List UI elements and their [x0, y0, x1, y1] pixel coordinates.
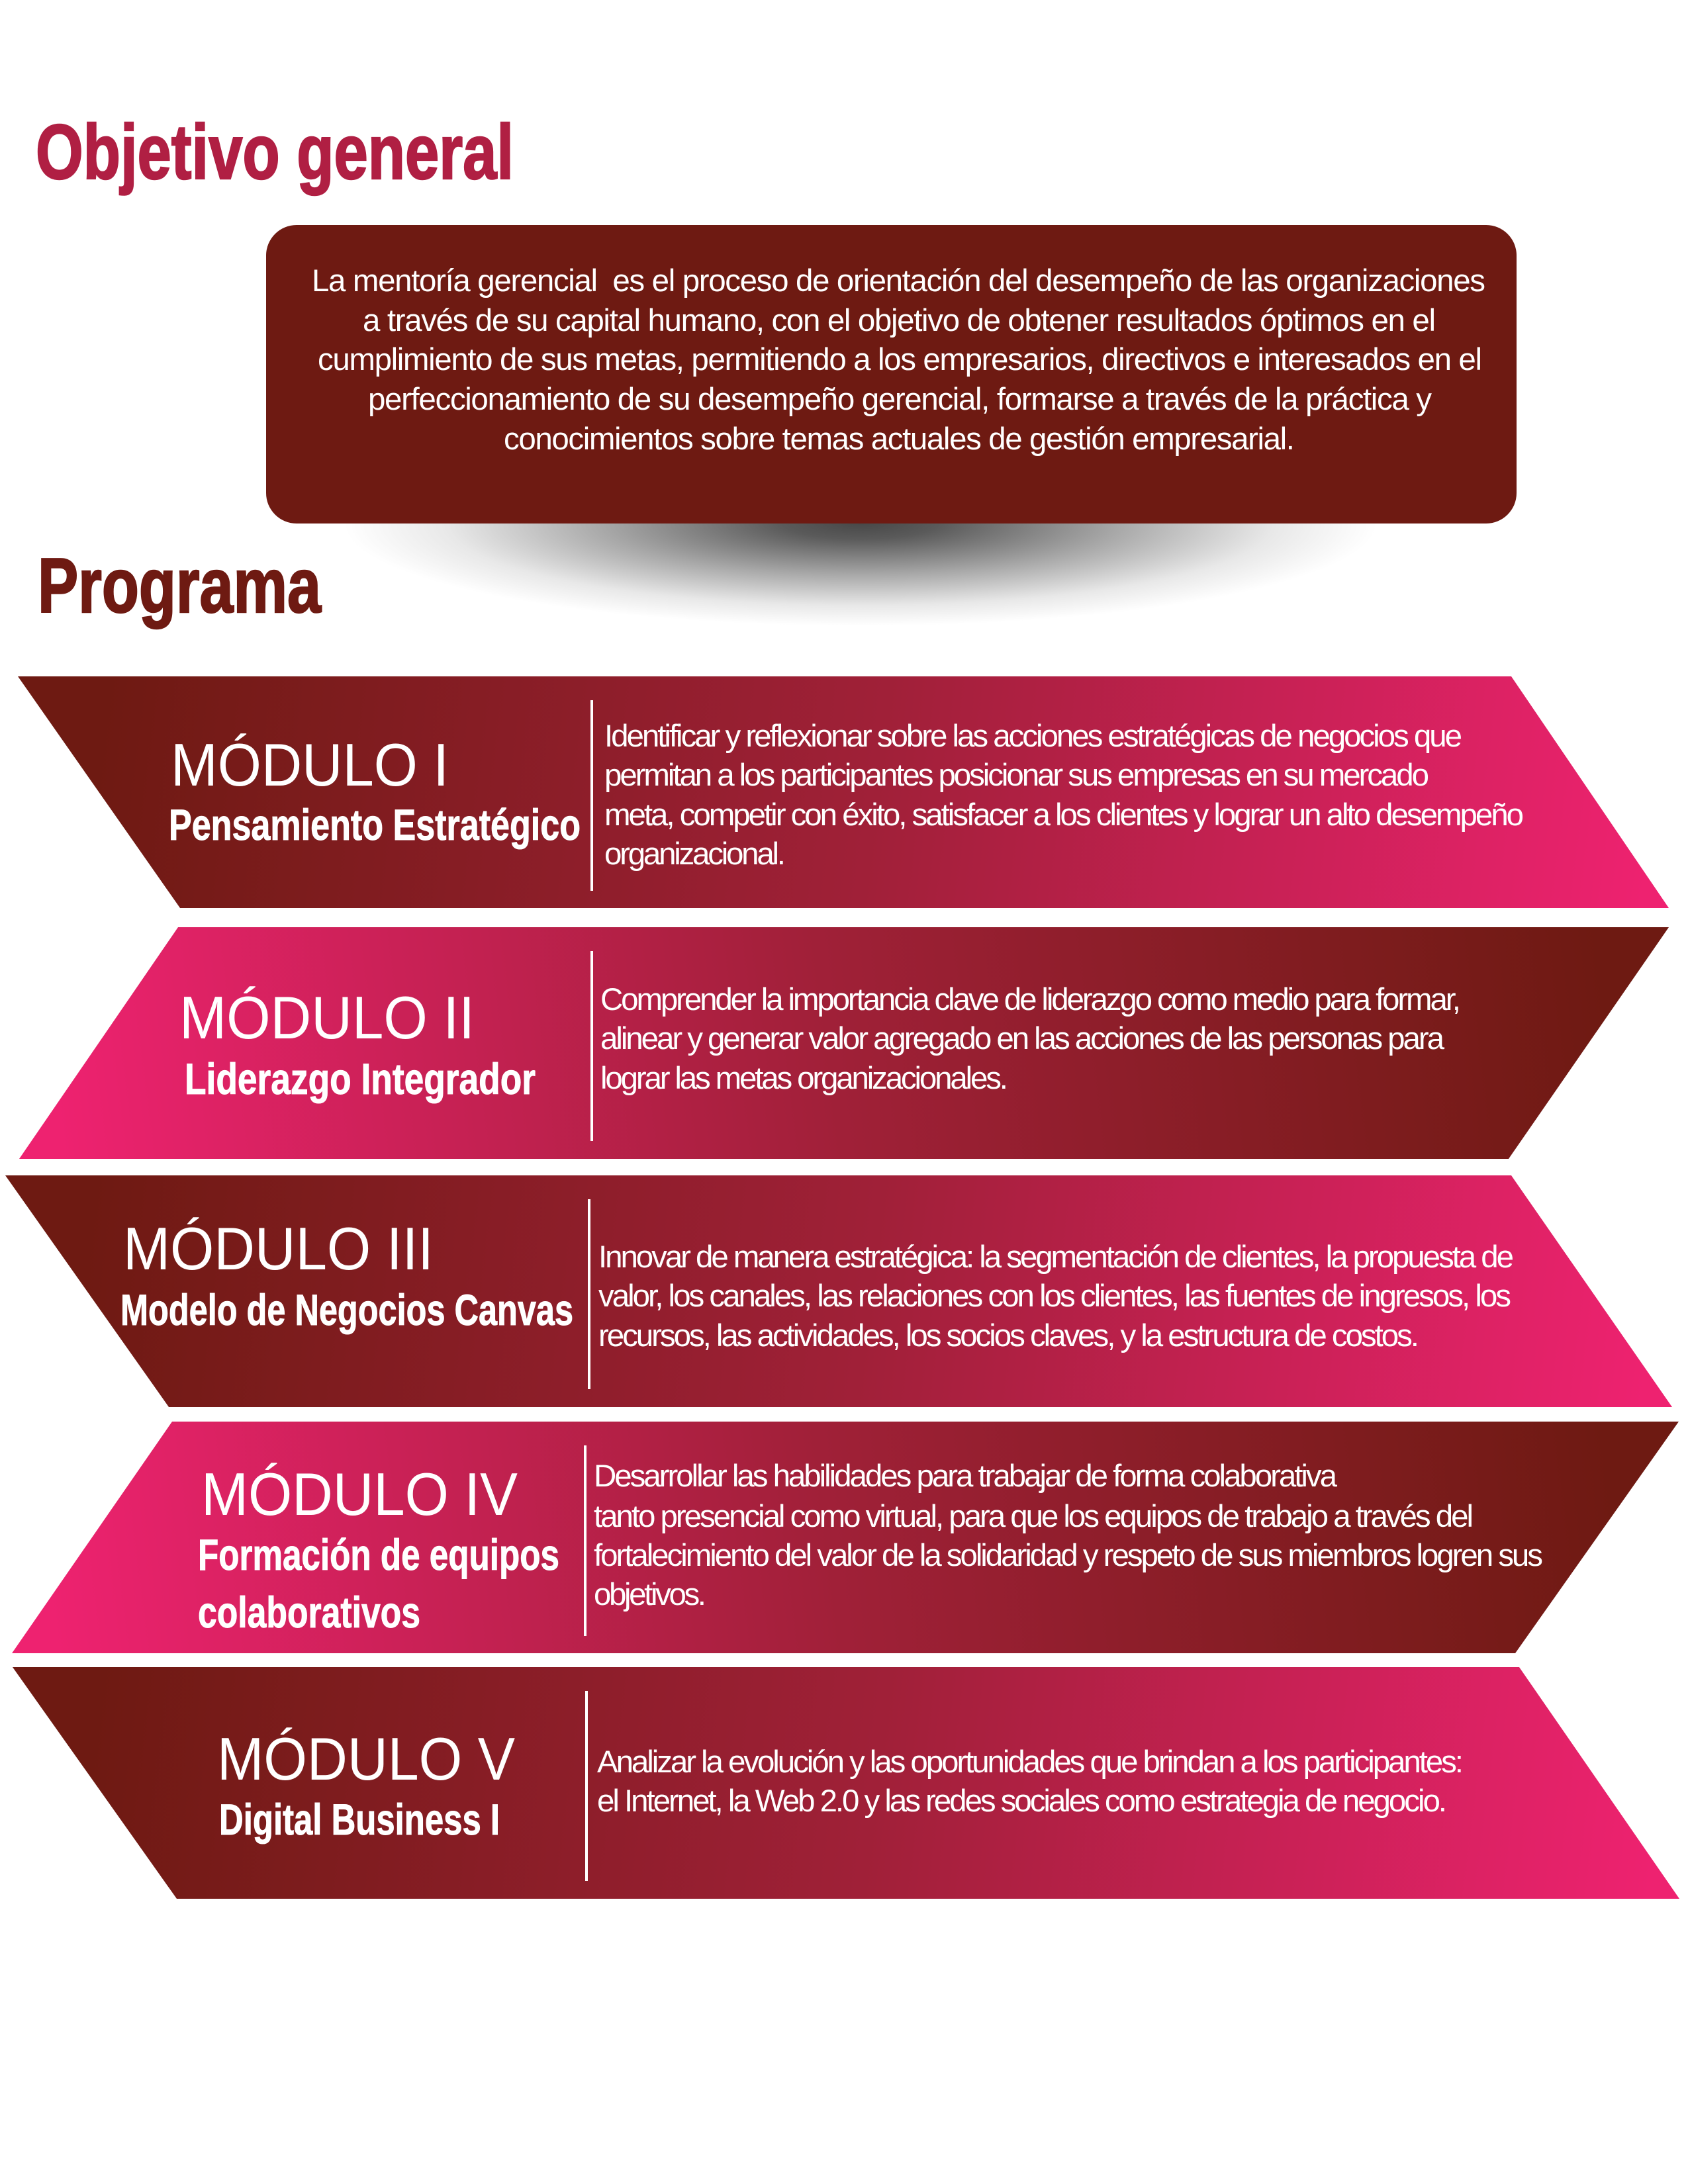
panel: módulo III — [5, 1175, 1672, 1407]
module description — [600, 982, 1461, 1096]
divider — [588, 1199, 590, 1389]
module title: MÓDULO V — [217, 1726, 515, 1793]
banner arrow — [18, 676, 1669, 908]
banner arrow — [19, 927, 1669, 1159]
module description: Innovar de manera estratégica: la segmentación de clientes, la propuesta de — [598, 1240, 1514, 1275]
banner arrow — [5, 1175, 1672, 1407]
module subtitle: Formación de equipos — [198, 1530, 559, 1579]
objective text — [312, 263, 1485, 457]
module description: meta, competir con éxito, satisfacer a los clientes y lograr un alto desempeño — [604, 797, 1524, 833]
module description: fortalecimiento del valor de la solidaridad y respeto de sus miembros logren sus — [594, 1538, 1543, 1573]
module subtitle: colaborativos — [198, 1588, 420, 1637]
banner arrow — [12, 1422, 1679, 1653]
objective text: La mentoría gerencial es el proceso de orientación del desempeño de las organizaciones — [312, 263, 1485, 298]
module description: permitan a los participantes posicionar sus empresas en su mercado — [604, 758, 1429, 793]
objective text: cumplimiento de sus metas, permitiendo a los empresarios, directivos e interesados en el — [318, 342, 1482, 377]
module description — [604, 719, 1524, 872]
module subtitle: Pensamiento Estratégico — [169, 800, 581, 849]
module subtitle — [198, 1530, 559, 1637]
shadow under objective panel — [344, 421, 1377, 626]
module description: Identificar y reflexionar sobre las acciones estratégicas de negocios que — [604, 719, 1462, 754]
objective text: conocimientos sobre temas actuales de gestión empresarial. — [504, 422, 1295, 457]
title: Objetivo general: Objetivo general — [36, 109, 514, 195]
panel background — [266, 225, 1517, 523]
divider — [590, 951, 593, 1141]
panel: módulo IV — [12, 1422, 1679, 1653]
module description: lograr las metas organizacionales. — [600, 1061, 1008, 1096]
module description: organizacional. — [604, 837, 786, 872]
module subtitle: Liderazgo Integrador — [185, 1054, 536, 1103]
module description — [598, 1240, 1514, 1353]
module description: Desarrollar las habilidades para trabajar de forma colaborativa — [594, 1459, 1338, 1494]
module description — [594, 1459, 1543, 1612]
heading: Programa: Programa — [38, 542, 322, 629]
module description: recursos, las actividades, los socios claves, y la estructura de costos. — [598, 1318, 1419, 1353]
module subtitle: Digital Business I — [219, 1795, 500, 1844]
panel: módulo II — [19, 927, 1669, 1159]
divider — [590, 700, 593, 891]
divider — [585, 1691, 588, 1881]
panel: módulo I — [18, 676, 1669, 908]
module description: valor, los canales, las relaciones con los clientes, las fuentes de ingresos, los — [598, 1279, 1511, 1314]
module description: alinear y generar valor agregado en las acciones de las personas para — [600, 1021, 1445, 1056]
module title: MÓDULO IV — [201, 1461, 518, 1528]
objective text: perfeccionamiento de su desempeño gerencial, formarse a través de la práctica y — [368, 382, 1432, 417]
module subtitle: Modelo de Negocios Canvas — [120, 1285, 573, 1334]
panel: objective description — [266, 225, 1517, 523]
module title: MÓDULO II — [179, 985, 475, 1052]
panel: módulo V — [13, 1667, 1679, 1899]
module title: MÓDULO III — [123, 1216, 434, 1283]
banner arrow — [13, 1667, 1679, 1899]
module description: objetivos. — [594, 1577, 706, 1612]
module description: Comprender la importancia clave de liderazgo como medio para formar, — [600, 982, 1461, 1017]
module description: Analizar la evolución y las oportunidades que brindan a los participantes: — [597, 1745, 1464, 1780]
divider — [584, 1445, 586, 1636]
module description: tanto presencial como virtual, para que los equipos de trabajo a través del — [594, 1499, 1474, 1534]
module title: MÓDULO I — [171, 732, 449, 799]
module description — [597, 1745, 1464, 1819]
objective text: a través de su capital humano, con el objetivo de obtener resultados óptimos en el — [363, 303, 1436, 338]
module description: el Internet, la Web 2.0 y las redes sociales como estrategia de negocio. — [597, 1784, 1447, 1819]
